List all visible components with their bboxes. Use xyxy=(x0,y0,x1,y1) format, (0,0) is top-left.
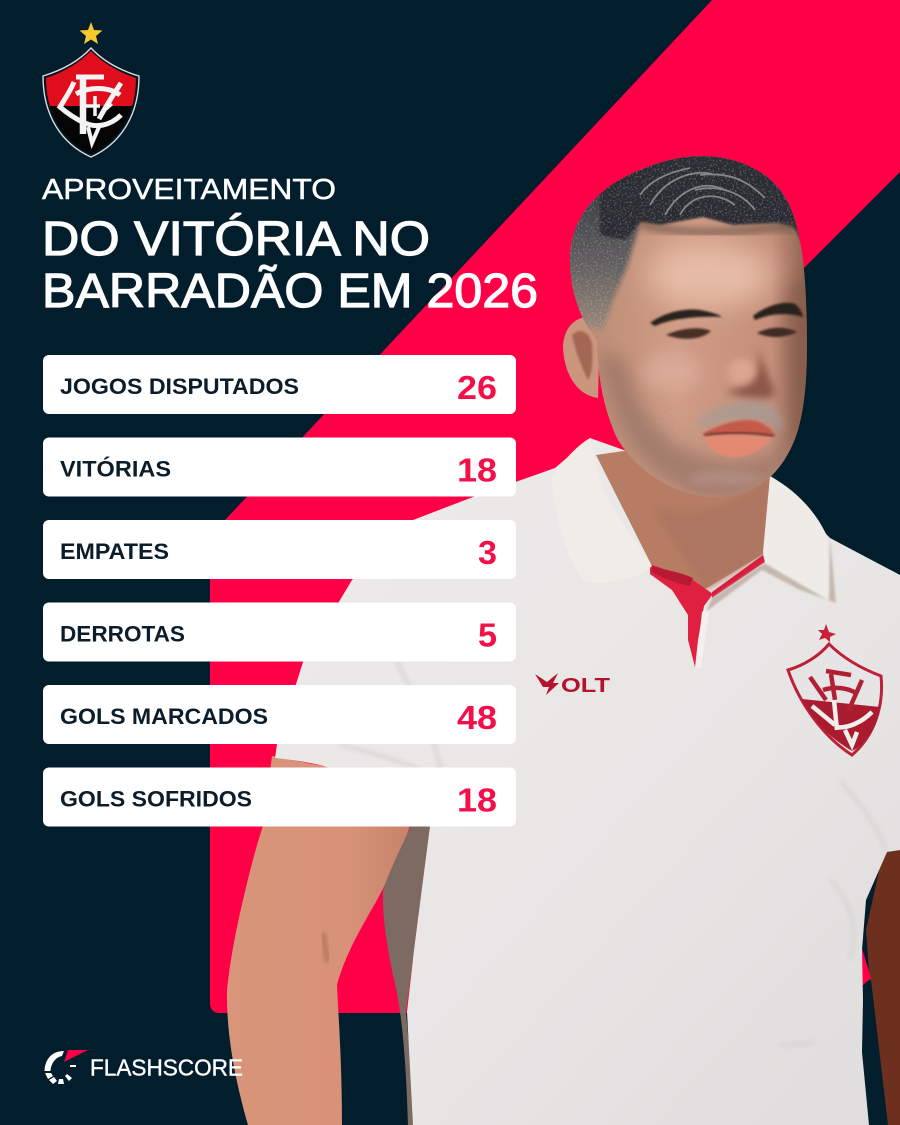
title xyxy=(42,174,538,318)
crest monogram light xyxy=(812,700,872,745)
right collar xyxy=(763,476,830,600)
head xyxy=(570,156,807,497)
crest star xyxy=(818,624,836,642)
row: vitorias: VITÓRIAS xyxy=(60,456,171,482)
red placket xyxy=(650,564,713,667)
stats table xyxy=(43,355,516,826)
row: gols sofridos: GOLS SOFRIDOS xyxy=(60,786,252,812)
crest monogram xyxy=(810,671,862,712)
monogram xyxy=(60,77,121,143)
moustache stubble xyxy=(697,401,783,432)
shirt crest xyxy=(788,624,882,755)
chin highlight xyxy=(687,470,763,486)
row: empates: EMPATES xyxy=(60,539,169,564)
row: gols marcados xyxy=(43,685,516,744)
red diagonal panel xyxy=(210,0,900,1013)
title line 2: DO VITÓRIA NO xyxy=(42,212,430,266)
right face shadow xyxy=(786,270,812,450)
row: jogos disputados: 26 xyxy=(457,369,497,406)
left collar xyxy=(552,438,652,583)
stubble grain xyxy=(608,398,800,490)
row: jogos disputados xyxy=(43,355,516,414)
right eyebrow xyxy=(753,303,803,320)
crest lower red xyxy=(802,699,880,751)
logo mark xyxy=(44,1050,88,1084)
nose highlight xyxy=(728,359,756,385)
hair grain xyxy=(570,156,798,330)
forehead highlight xyxy=(648,243,772,307)
left eyebrow xyxy=(650,310,722,326)
Flashscore logo xyxy=(44,1050,243,1084)
upper lip xyxy=(702,420,775,435)
cheek highlight xyxy=(644,352,700,392)
crest shield xyxy=(788,644,882,755)
placket strap xyxy=(652,566,693,586)
VOLT sponsor logo: OLT xyxy=(561,675,610,697)
row: gols marcados: 48 xyxy=(457,699,497,736)
red sliver xyxy=(861,945,871,986)
row: jogos disputados: JOGOS DISPUTADOS xyxy=(60,374,299,399)
VOLT sponsor logo xyxy=(535,673,610,697)
logo wordmark: FLASHSCORE xyxy=(90,1054,243,1080)
placket white trim xyxy=(696,563,765,668)
row: empates: 3 xyxy=(478,534,497,571)
dark gap xyxy=(862,980,888,1125)
red collar trim xyxy=(712,555,765,598)
row: vitorias: 18 xyxy=(457,452,497,488)
left eye xyxy=(666,328,711,339)
right arm xyxy=(866,848,900,1125)
club crest xyxy=(40,22,142,161)
row: derrotas xyxy=(43,602,516,662)
torso and sleeves xyxy=(275,438,900,1125)
row: gols sofridos: 18 xyxy=(457,782,497,818)
hairline shadow xyxy=(640,224,795,232)
facial shading xyxy=(560,150,812,500)
stubble jaw xyxy=(598,350,805,500)
neck xyxy=(596,440,772,592)
row: gols sofridos xyxy=(43,768,516,826)
bolt mark xyxy=(535,673,559,695)
hair strands xyxy=(640,168,765,215)
collar shadow xyxy=(706,538,836,612)
left arm xyxy=(227,756,445,1125)
hair side fade xyxy=(570,178,642,332)
row: derrotas: 5 xyxy=(478,616,497,654)
title line 1: APROVEITAMENTO xyxy=(42,174,336,206)
row: gols marcados: GOLS MARCADOS xyxy=(60,704,268,729)
nose side shadow xyxy=(726,352,778,402)
mouth line xyxy=(704,433,774,436)
shield outline xyxy=(43,48,139,157)
ear xyxy=(563,317,600,398)
row: derrotas: DERROTAS xyxy=(60,622,185,646)
shirt folds xyxy=(340,660,885,1045)
right eye xyxy=(757,328,797,337)
coach photo illustration xyxy=(227,150,900,1125)
underarm shadow xyxy=(383,826,430,1125)
title line 3: BARRADÃO EM 2026 xyxy=(42,264,538,318)
row: vitorias xyxy=(43,438,516,496)
neck shadow xyxy=(650,475,770,590)
gold star xyxy=(80,22,102,44)
elbow crease xyxy=(323,933,328,962)
row: empates xyxy=(43,520,516,579)
hair top dark xyxy=(599,156,800,244)
shield fill xyxy=(46,51,136,154)
ear inner xyxy=(572,331,592,380)
lower lip xyxy=(703,435,771,457)
